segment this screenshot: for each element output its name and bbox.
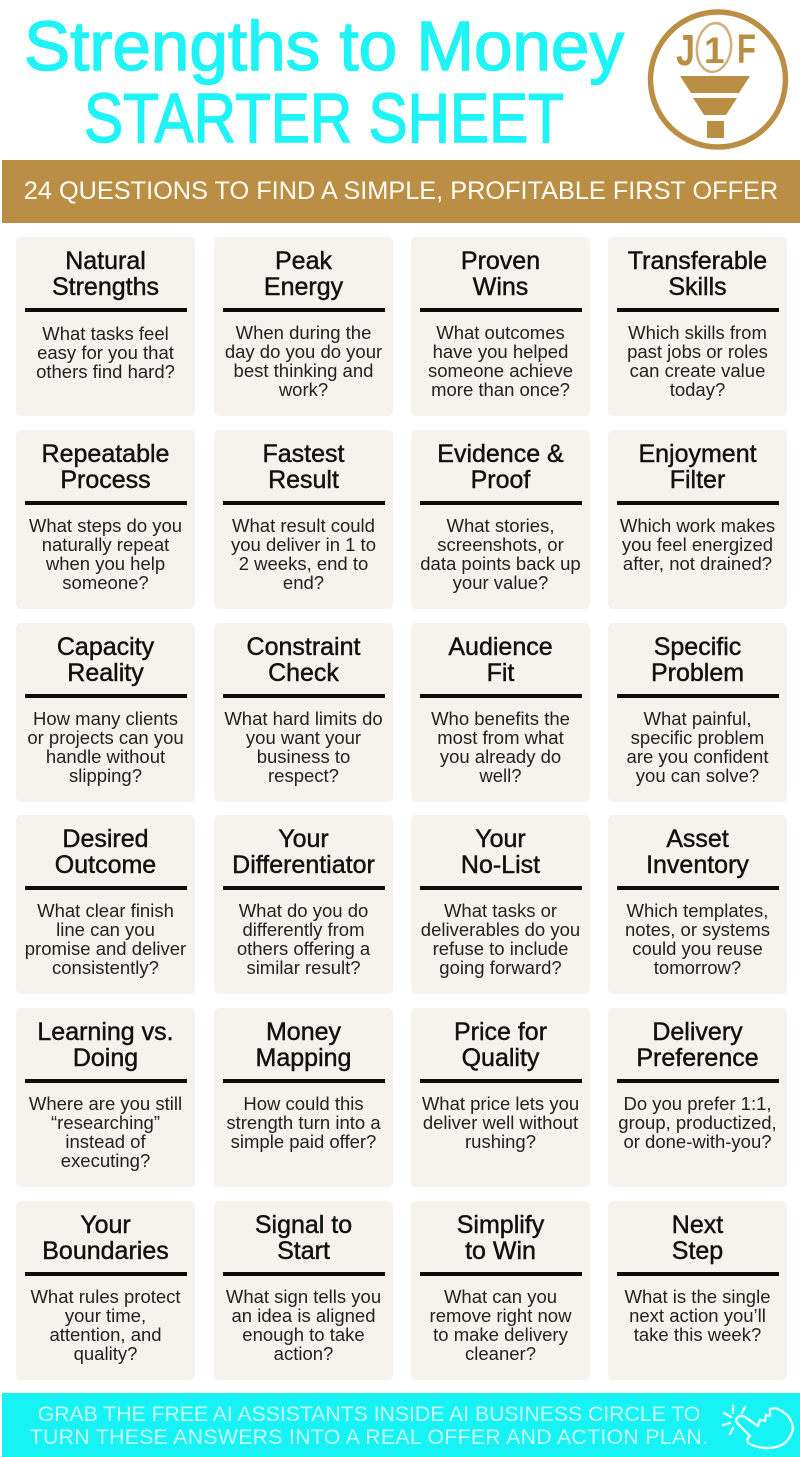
card: Natural Strengths: easy for you that — [37, 342, 174, 363]
card: Fastest Result: Result — [268, 466, 339, 494]
card: Delivery Preference: Delivery — [652, 1018, 743, 1046]
card: Constraint Check: Check — [268, 659, 339, 687]
icon: J1F funnel logo: F — [737, 26, 756, 72]
card: Desired Outcome: Desired — [62, 825, 149, 853]
card: Evidence & Proof: Evidence & — [437, 440, 564, 468]
card: Learning vs. Doing: instead of — [65, 1130, 146, 1152]
card: Enjoyment Filter: you feel energized — [622, 534, 773, 554]
card: Price for Quality: deliver well without — [423, 1112, 578, 1132]
card: Learning vs. Doing: Where are you still — [29, 1092, 182, 1114]
card: Audience Fit: Fit — [487, 659, 514, 687]
card: Simplify to Win: cleaner? — [465, 1342, 536, 1364]
card: Proven Wins: more than once? — [431, 378, 570, 400]
card: Evidence & Proof: Proof — [471, 466, 530, 494]
card: Your No-List: refuse to include — [433, 938, 568, 958]
card: Price for Quality: rushing? — [465, 1130, 536, 1152]
card: Constraint Check: you want your — [246, 726, 361, 748]
card: Capacity Reality — [16, 623, 195, 802]
card: Signal to Start: action? — [274, 1342, 333, 1364]
card: Capacity Reality: or projects can you — [27, 726, 184, 748]
footer text: TURN THESE ANSWERS INTO A REAL OFFER AND ACTION PLAN. — [30, 1426, 708, 1449]
card: Enjoyment Filter: Enjoyment — [638, 440, 757, 468]
card: Learning vs. Doing: executing? — [61, 1150, 150, 1170]
card: Fastest Result: What result could — [232, 514, 375, 536]
card: Your Differentiator: others offering a — [237, 938, 370, 958]
card: Repeatable Process: naturally repeat — [42, 534, 169, 554]
card: Signal to Start — [214, 1201, 393, 1380]
card: Next Step: Step — [672, 1237, 723, 1265]
card: Enjoyment Filter: Filter — [670, 466, 725, 494]
card: Your No-List: No-List — [461, 851, 540, 879]
card: Your Boundaries: Your — [80, 1211, 131, 1239]
card: Price for Quality: Price for — [454, 1018, 547, 1046]
card: Money Mapping: Mapping — [256, 1044, 351, 1072]
card: Desired Outcome: line can you — [56, 918, 155, 940]
card: Transferable Skills — [608, 237, 787, 416]
card: Capacity Reality: Capacity — [57, 633, 154, 661]
card: Repeatable Process: Repeatable — [42, 440, 169, 468]
card: Proven Wins: What outcomes — [436, 322, 565, 342]
card: Constraint Check: business to — [257, 746, 350, 766]
card: Desired Outcome: What clear finish — [37, 900, 174, 920]
card: Fastest Result — [214, 430, 393, 609]
card: Your No-List: deliverables do you — [421, 918, 580, 940]
card: Proven Wins: someone achieve — [428, 360, 573, 380]
card: Proven Wins — [411, 237, 590, 416]
card: Desired Outcome — [16, 815, 195, 994]
card: Evidence & Proof: What stories, — [447, 514, 554, 536]
card: Next Step: take this week? — [634, 1324, 761, 1344]
card: Fastest Result: you deliver in 1 to — [231, 534, 376, 554]
card: Peak Energy: best thinking and — [234, 360, 373, 380]
card: Transferable Skills: can create value — [630, 360, 765, 380]
card: Peak Energy — [214, 237, 393, 416]
card: Fastest Result: 2 weeks, end to — [239, 552, 368, 574]
card: Natural Strengths: others find hard? — [36, 361, 175, 382]
card: Natural Strengths — [16, 237, 195, 416]
card: Transferable Skills: Transferable — [628, 247, 767, 275]
card: Asset Inventory — [608, 815, 787, 994]
card: Evidence & Proof: data points back up — [420, 552, 581, 574]
card: Your No-List: What tasks or — [444, 900, 557, 920]
title: STARTER SHEET — [84, 79, 564, 157]
card: Specific Problem: specific problem — [631, 726, 764, 748]
card: Learning vs. Doing: Doing — [73, 1044, 138, 1072]
card: Learning vs. Doing — [16, 1008, 195, 1187]
card: Specific Problem: you can solve? — [636, 764, 759, 786]
card: Desired Outcome: consistently? — [52, 956, 159, 978]
card: Your Differentiator: similar result? — [246, 956, 361, 978]
card: Evidence & Proof: your value? — [453, 572, 548, 592]
card: Transferable Skills: Which skills from — [628, 322, 767, 342]
card: Peak Energy: Peak — [275, 247, 332, 275]
card: Simplify to Win — [411, 1201, 590, 1380]
card: Your Boundaries: Boundaries — [42, 1237, 169, 1265]
card: Audience Fit: you already do — [440, 746, 561, 766]
card: Your No-List: Your — [475, 825, 526, 853]
card: Your Differentiator: Differentiator — [232, 851, 375, 879]
card: Money Mapping — [214, 1008, 393, 1187]
card: Learning vs. Doing: “researching” — [51, 1112, 160, 1132]
card: Desired Outcome: Outcome — [55, 851, 156, 879]
footer text — [30, 1403, 708, 1449]
card: Simplify to Win: to Win — [465, 1237, 536, 1265]
card: Delivery Preference: Preference — [636, 1044, 759, 1072]
card: Money Mapping: simple paid offer? — [231, 1130, 376, 1152]
card: Delivery Preference: or done-with-you? — [623, 1130, 772, 1152]
card: Next Step: next action you’ll — [629, 1304, 766, 1326]
card: Simplify to Win: What can you — [444, 1286, 557, 1306]
card: Delivery Preference: Do you prefer 1:1, — [623, 1092, 772, 1114]
card: Signal to Start: an idea is aligned — [232, 1304, 376, 1326]
card: Capacity Reality: slipping? — [69, 764, 142, 786]
card: Proven Wins: Proven — [461, 247, 540, 275]
card: Repeatable Process — [16, 430, 195, 609]
card: Asset Inventory: Asset — [666, 825, 729, 853]
card: Price for Quality — [411, 1008, 590, 1187]
card: Peak Energy: When during the — [236, 322, 371, 342]
card: Your Boundaries — [16, 1201, 195, 1380]
card: Constraint Check: Constraint — [247, 633, 360, 661]
card: Asset Inventory: Which templates, — [627, 900, 768, 920]
card: Money Mapping: How could this — [243, 1092, 364, 1114]
icon: J1F funnel logo: J — [676, 26, 695, 75]
card: Your Differentiator: Your — [278, 825, 329, 853]
card: Peak Energy: work? — [279, 378, 328, 400]
card: Specific Problem: What painful, — [644, 708, 751, 728]
card: Delivery Preference — [608, 1008, 787, 1187]
card: Specific Problem: are you confident — [627, 746, 768, 766]
card: Signal to Start: enough to take — [242, 1324, 365, 1344]
card: Signal to Start: Signal to — [255, 1211, 352, 1239]
card: Constraint Check: What hard limits do — [224, 708, 383, 728]
banner: subtitle — [2, 160, 800, 223]
card: Enjoyment Filter — [608, 430, 787, 609]
card: Your No-List: going forward? — [439, 956, 562, 978]
card: Evidence & Proof: screenshots, or — [437, 534, 564, 554]
card: Your Differentiator — [214, 815, 393, 994]
card: Next Step — [608, 1201, 787, 1380]
card: Audience Fit: well? — [479, 764, 522, 786]
card: Money Mapping: Money — [266, 1018, 341, 1046]
card: Constraint Check: respect? — [268, 764, 339, 786]
card: Transferable Skills: today? — [670, 378, 725, 400]
footer call to action — [2, 1393, 800, 1457]
banner: subtitle: 24 QUESTIONS TO FIND A SIMPLE, PROFITABLE FIRST OFFER — [24, 177, 778, 205]
card: Money Mapping: strength turn into a — [226, 1112, 381, 1132]
card: Your Differentiator: differently from — [242, 918, 364, 940]
card: Next Step: What is the single — [624, 1286, 770, 1306]
card: Learning vs. Doing: Learning vs. — [37, 1018, 174, 1046]
card: Enjoyment Filter: after, not drained? — [623, 552, 772, 574]
card: Constraint Check — [214, 623, 393, 802]
icon: tapping hand — [722, 1404, 794, 1450]
card: Asset Inventory: Inventory — [646, 851, 749, 879]
card: Capacity Reality: Reality — [67, 659, 144, 687]
card: Simplify to Win: Simplify — [457, 1211, 544, 1239]
card: Your Boundaries: quality? — [74, 1342, 137, 1364]
card: Price for Quality: Quality — [462, 1044, 539, 1072]
card: Proven Wins: have you helped — [433, 340, 568, 362]
card: Desired Outcome: promise and deliver — [25, 938, 186, 958]
card: Your Differentiator: What do you do — [239, 900, 368, 920]
card: Natural Strengths: What tasks feel — [42, 323, 169, 344]
card: Audience Fit — [411, 623, 590, 802]
card: Evidence & Proof — [411, 430, 590, 609]
card: Capacity Reality: How many clients — [33, 708, 178, 728]
card: Transferable Skills: Skills — [668, 273, 727, 301]
card: Enjoyment Filter: Which work makes — [620, 514, 775, 536]
card: Delivery Preference: group, productized, — [618, 1112, 777, 1132]
card: Peak Energy: Energy — [264, 273, 343, 301]
title — [24, 7, 625, 157]
icon: J1F funnel logo — [648, 9, 788, 150]
card: Audience Fit: Audience — [448, 633, 553, 661]
card: Simplify to Win: to make delivery — [433, 1324, 568, 1344]
card: Specific Problem — [608, 623, 787, 802]
card: Specific Problem: Problem — [651, 659, 744, 687]
card: Repeatable Process: Process — [60, 466, 151, 494]
title: Strengths to Money — [24, 7, 624, 85]
card: Your No-List — [411, 815, 590, 994]
card: Proven Wins: Wins — [473, 273, 528, 301]
card: Asset Inventory: notes, or systems — [625, 918, 770, 940]
card: Price for Quality: What price lets you — [422, 1092, 579, 1114]
icon: J1F funnel logo: 1 — [704, 30, 725, 71]
card: Asset Inventory: could you reuse — [632, 938, 763, 958]
card: Natural Strengths: Strengths — [52, 273, 159, 301]
card: Your Boundaries: your time, — [65, 1304, 146, 1326]
card: Repeatable Process: when you help — [46, 552, 165, 574]
card: Simplify to Win: remove right now — [430, 1304, 571, 1326]
footer text: GRAB THE FREE AI ASSISTANTS INSIDE AI BUSINESS CIRCLE TO — [38, 1403, 700, 1426]
card: Repeatable Process: someone? — [62, 572, 149, 592]
card: Your Boundaries: attention, and — [49, 1324, 162, 1344]
card: Audience Fit: Who benefits the — [431, 708, 570, 728]
card: Capacity Reality: handle without — [46, 746, 165, 766]
card: Signal to Start: Start — [277, 1237, 330, 1265]
card: Signal to Start: What sign tells you — [226, 1286, 381, 1306]
card: Fastest Result: end? — [283, 572, 324, 592]
card: Peak Energy: day do you do your — [225, 340, 382, 362]
card: Audience Fit: most from what — [437, 726, 564, 748]
card: Your Boundaries: What rules protect — [30, 1286, 181, 1306]
card: Fastest Result: Fastest — [262, 440, 344, 468]
card: Transferable Skills: past jobs or roles — [627, 340, 768, 362]
card: Next Step: Next — [672, 1211, 723, 1239]
card: Specific Problem: Specific — [654, 633, 741, 661]
card: Repeatable Process: What steps do you — [29, 514, 182, 536]
card: Asset Inventory: tomorrow? — [654, 956, 741, 978]
card: Natural Strengths: Natural — [65, 247, 146, 275]
